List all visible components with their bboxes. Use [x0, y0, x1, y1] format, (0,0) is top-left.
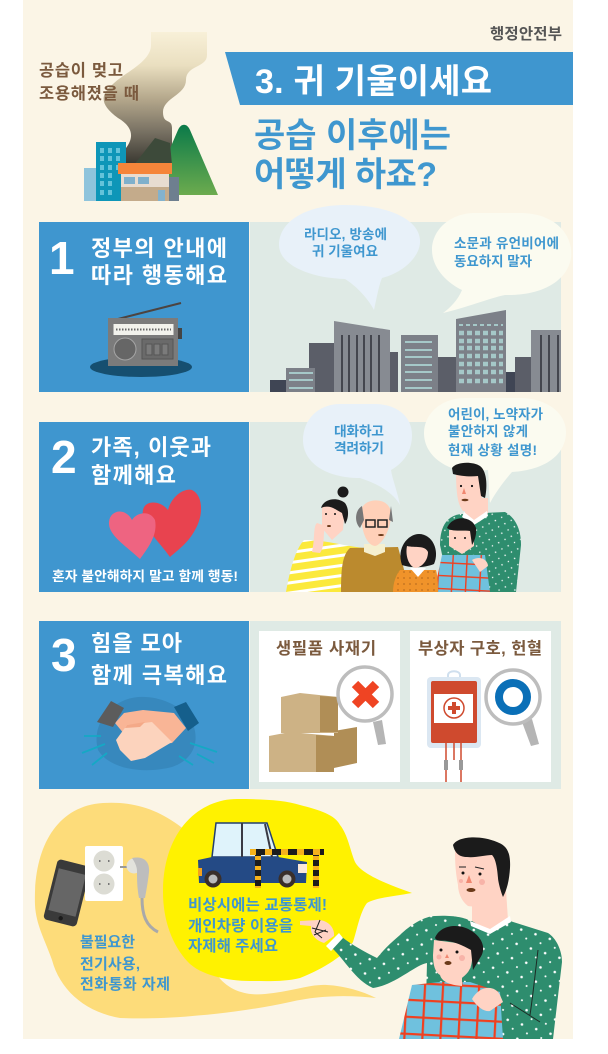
step number 3: 3: [51, 629, 77, 681]
card: panic buying: 생필품 사재기: [276, 639, 376, 658]
traffic control text: 비상시에는 교통통제!: [188, 896, 327, 914]
icon: plug and cable: [120, 858, 158, 932]
panel: step 2: [39, 398, 566, 592]
step number 1: 1: [49, 232, 75, 284]
banner title: 3. 귀 기울이세요: [255, 63, 492, 101]
panel: step 1: [39, 205, 571, 392]
father hand on shoulder: [472, 988, 503, 1011]
person: grandfather: [341, 500, 410, 592]
step 2 heading: [91, 435, 211, 488]
person: girl: [393, 534, 438, 592]
icon: phone: [43, 859, 91, 927]
step 3 heading: 힘을 모아: [91, 631, 182, 656]
hand knuckle marks: [312, 920, 328, 938]
son neck and face: [433, 940, 472, 986]
speech bubble: explain: 불안하지 않게: [448, 424, 528, 439]
icon: handshake: [82, 697, 217, 770]
panel: step 3: [39, 621, 561, 789]
power saving text: 전화통화 자제: [80, 976, 170, 993]
cuff: [326, 933, 343, 951]
speech bubble: talk: 대화하고: [334, 424, 384, 439]
speech bubble: explain: 현재 상황 설명!: [448, 443, 537, 458]
blue card: [39, 621, 249, 789]
ministry name: 행정안전부: [490, 25, 562, 43]
step 1 heading: 정부의 안내에: [91, 236, 227, 261]
icon: grey annex: [169, 177, 179, 201]
icon: wall socket: [85, 846, 123, 901]
icon: radio: [90, 303, 192, 377]
orange bubble: [35, 803, 376, 1018]
step 2 heading: 함께해요: [91, 463, 176, 488]
person: father: [440, 463, 521, 592]
callout: power and phone saving: [35, 803, 376, 1018]
step 2 note: 혼자 불안해하지 말고 함께 행동!: [52, 568, 238, 584]
son hair: [435, 926, 483, 970]
icon: light building: [84, 168, 98, 201]
father face: [455, 848, 503, 907]
speech bubble: radio: 라디오, 방송에: [304, 227, 387, 242]
scene background: [250, 222, 561, 392]
heading: 어떻게 하죠?: [254, 156, 437, 194]
step number 2: 2: [51, 431, 77, 483]
caption: after the raid: 조용해졌을 때: [39, 84, 139, 103]
father hair: [453, 837, 510, 897]
son sweater: [399, 982, 503, 1039]
icon: dark hill: [130, 138, 172, 170]
illustration: city skyline: [270, 310, 561, 392]
speech bubble: talk: [303, 404, 412, 505]
card: rescue and blood donation: 부상자 구호, 헌혈: [418, 639, 542, 658]
father facial features: [459, 867, 485, 892]
illustration: family: [286, 463, 521, 592]
illustration: smoke over town: [84, 32, 218, 201]
speech bubble: rumours: [432, 213, 571, 313]
power saving text: 불필요한: [80, 934, 135, 951]
step 1 heading: [91, 236, 227, 288]
step 3 heading: [91, 631, 227, 688]
blue card: [39, 222, 249, 392]
son facial features: [436, 948, 465, 965]
icon: magnifier with X: [338, 667, 392, 745]
scene background: [250, 621, 561, 789]
yellow bubble: [163, 799, 412, 981]
card: rescue and blood donation: [410, 631, 551, 782]
heading: [254, 117, 451, 194]
traffic control text: 개인차량 이용을: [188, 917, 293, 935]
pointing hand: [300, 920, 334, 943]
icon: car: [198, 823, 307, 888]
icon: blue tower: [96, 142, 126, 201]
icon: orange roof house: [118, 163, 172, 201]
traffic control text: 자제해 주세요: [188, 937, 278, 955]
speech bubble: rumours: 동요하지 말자: [454, 254, 533, 269]
icon: smoke plume: [104, 32, 207, 170]
icon: blood bag: [427, 671, 481, 782]
illustration: father and son: [300, 837, 562, 1039]
power saving text: 전기사용,: [80, 956, 140, 973]
step 3 heading: 함께 극복해요: [91, 663, 227, 688]
father sweater and arm: [332, 916, 562, 1039]
speech bubble: radio: [279, 205, 420, 310]
icon: magnifier with O: [486, 670, 540, 746]
banner: [225, 52, 573, 105]
sleeve fold lines: [510, 950, 540, 1022]
power saving text: [80, 934, 170, 993]
speech bubble: explain: 어린이, 노약자가: [448, 407, 544, 422]
person: mother: [286, 486, 363, 592]
heading: 공습 이후에는: [254, 117, 451, 155]
icon: hearts: [109, 490, 201, 559]
step 1 heading: 따라 행동해요: [91, 263, 227, 288]
icon: boxes: [269, 693, 357, 772]
callout: traffic control: [163, 799, 412, 981]
speech bubble: talk: 격려하기: [334, 441, 384, 456]
caption: after the raid: [39, 61, 139, 103]
traffic control text: [188, 896, 327, 955]
step 2 heading: 가족, 이웃과: [91, 435, 211, 460]
person: boy: [434, 518, 490, 592]
card: panic buying: [259, 631, 400, 782]
icon: mountain: [150, 125, 218, 195]
speech bubble: radio: 귀 기울여요: [312, 244, 378, 259]
scene background: [250, 422, 561, 592]
caption: after the raid: 공습이 멎고: [39, 61, 123, 80]
father neck: [472, 890, 508, 932]
speech bubble: rumours: 소문과 유언비어에: [454, 236, 559, 251]
father collar: [470, 916, 511, 934]
blue card: [39, 422, 249, 592]
speech bubble: explain: [424, 398, 566, 503]
icon: barrier: [250, 849, 324, 888]
